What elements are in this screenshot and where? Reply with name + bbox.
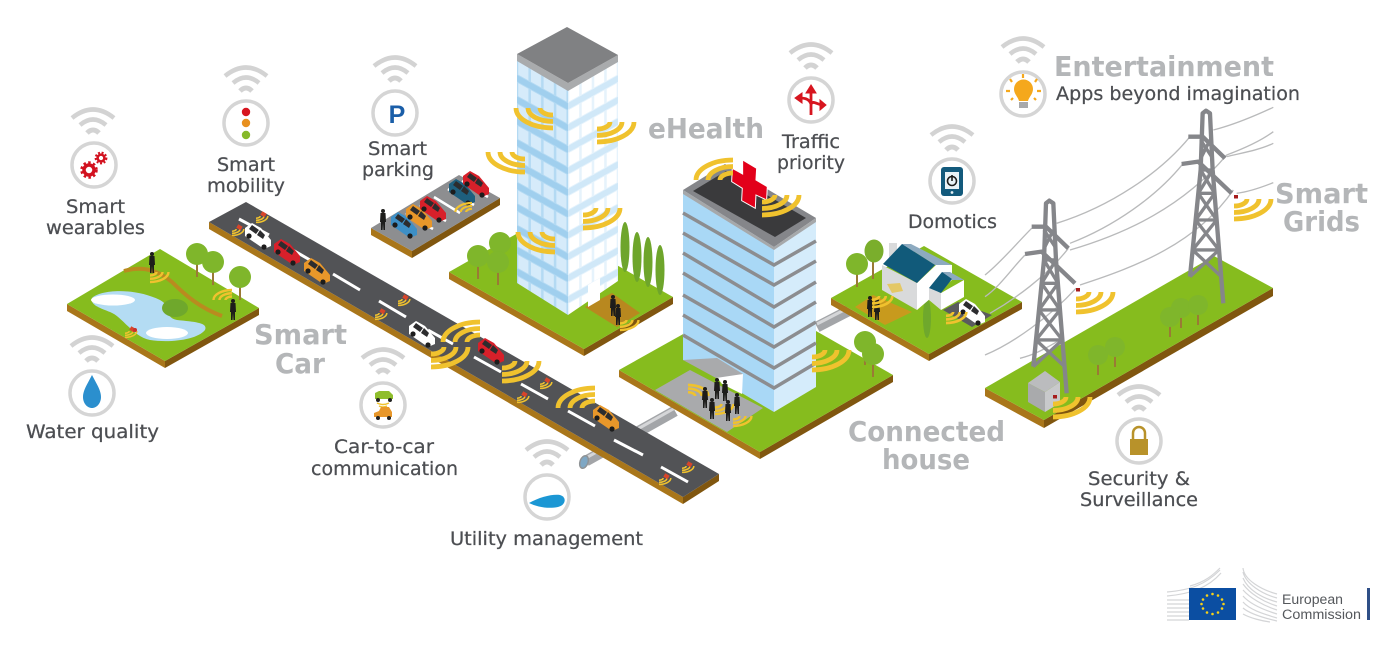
platform: connected house xyxy=(831,240,1022,361)
trees xyxy=(854,331,884,377)
heading: connected house: Connected xyxy=(848,415,1005,448)
item: traffic priority xyxy=(777,44,845,174)
item: car-to-car communication xyxy=(311,350,458,480)
lane dashes xyxy=(239,219,688,482)
label: Surveillance xyxy=(1080,489,1198,511)
parked cars xyxy=(391,171,489,239)
pylon left xyxy=(1025,201,1075,393)
label: parking xyxy=(362,159,434,181)
heading: connected house: house xyxy=(882,443,970,476)
wires xyxy=(985,107,1273,358)
icon: water drop xyxy=(83,375,101,408)
transformer box xyxy=(1028,371,1060,412)
lake highlights xyxy=(91,294,188,339)
person xyxy=(380,209,386,230)
people xyxy=(149,252,236,320)
entrance xyxy=(716,374,743,394)
item: smart wearables xyxy=(46,110,145,239)
trees xyxy=(846,240,931,338)
logo wordmark: European xyxy=(1282,592,1343,607)
signal at tower plaza xyxy=(620,320,638,330)
plaza xyxy=(655,370,763,432)
platform: smart parking xyxy=(371,171,500,258)
lake xyxy=(92,291,205,341)
grid signals xyxy=(1053,195,1271,417)
roof rim xyxy=(517,54,618,91)
heading: smart car: Smart xyxy=(254,318,347,351)
label: Smart xyxy=(66,196,125,218)
roof xyxy=(683,164,816,247)
item: water quality xyxy=(26,338,159,443)
label: Domotics xyxy=(908,211,997,233)
bush xyxy=(162,299,188,317)
logo: european commission xyxy=(1167,568,1370,622)
label: Water quality xyxy=(26,421,159,443)
item: entertainment xyxy=(1001,38,1300,116)
white car xyxy=(959,299,985,326)
heading: smart grids: Grids xyxy=(1283,205,1360,238)
driveway xyxy=(943,302,992,327)
entrance door xyxy=(588,278,600,307)
icon: red arrows xyxy=(795,85,826,115)
cars xyxy=(245,223,619,432)
label: Traffic xyxy=(781,131,840,153)
heading: smart car: Car xyxy=(275,347,325,380)
label: priority xyxy=(777,152,845,174)
label: mobility xyxy=(207,175,285,197)
hospital signals xyxy=(688,160,849,426)
label: wearables xyxy=(46,217,145,239)
platform: office tower xyxy=(449,221,673,356)
label: communication xyxy=(311,458,458,480)
icon: traffic light xyxy=(242,108,250,139)
logo bar xyxy=(1367,588,1370,620)
red cross xyxy=(732,160,767,208)
platform: lake park xyxy=(67,243,259,368)
label: Car-to-car xyxy=(334,436,434,458)
parking lines xyxy=(406,181,488,229)
platform: hospital xyxy=(619,295,893,459)
yard xyxy=(855,295,912,325)
stars xyxy=(1200,593,1225,615)
icon: gears xyxy=(82,153,106,178)
office tower xyxy=(517,27,618,315)
sensors xyxy=(125,272,232,337)
label: Utility management xyxy=(450,528,643,550)
label: Apps beyond imagination xyxy=(1056,83,1300,105)
hospital building xyxy=(683,164,816,412)
item: smart parking xyxy=(362,58,434,181)
heading: smart grids: Smart xyxy=(1275,177,1368,210)
pylon right xyxy=(1182,111,1232,303)
label: Security & xyxy=(1088,468,1190,490)
plaza xyxy=(585,293,640,327)
heading: Entertainment xyxy=(1054,50,1274,83)
underground pipes xyxy=(578,307,850,469)
icon: padlock xyxy=(1130,427,1148,455)
label: Smart xyxy=(368,138,427,160)
item: security and surveillance xyxy=(1080,386,1198,511)
people at tower xyxy=(610,295,621,325)
item: utility management xyxy=(450,442,643,550)
label: Smart xyxy=(217,154,275,176)
heading: ehealth: eHealth xyxy=(648,112,764,145)
people at hospital xyxy=(702,378,740,421)
trees xyxy=(186,243,251,300)
tower signals xyxy=(488,108,634,252)
house signals xyxy=(872,296,966,323)
road: smart car xyxy=(209,202,719,504)
car-to-car signals xyxy=(431,322,595,408)
trees xyxy=(1088,295,1208,375)
item: domotics xyxy=(908,126,997,233)
power lines and pylons xyxy=(985,107,1273,393)
icon: P: P xyxy=(389,101,405,129)
item: smart mobility xyxy=(207,68,285,197)
icon: flat water drop xyxy=(529,495,565,508)
trees xyxy=(467,222,664,295)
icon: light bulb xyxy=(1006,74,1041,108)
road sensors xyxy=(232,211,694,484)
roof xyxy=(517,27,618,83)
icon: phone xyxy=(941,167,963,196)
people xyxy=(867,296,880,320)
flag xyxy=(1189,588,1236,620)
footpath xyxy=(124,269,222,316)
parking sensor signal xyxy=(455,203,472,212)
canopy xyxy=(683,358,743,378)
building fans xyxy=(1167,568,1277,622)
logo wordmark: Commission xyxy=(1282,607,1361,622)
floor stripes xyxy=(683,213,816,388)
platform: smart grid xyxy=(985,256,1273,428)
house xyxy=(882,243,964,310)
icon: two cars xyxy=(374,391,393,420)
